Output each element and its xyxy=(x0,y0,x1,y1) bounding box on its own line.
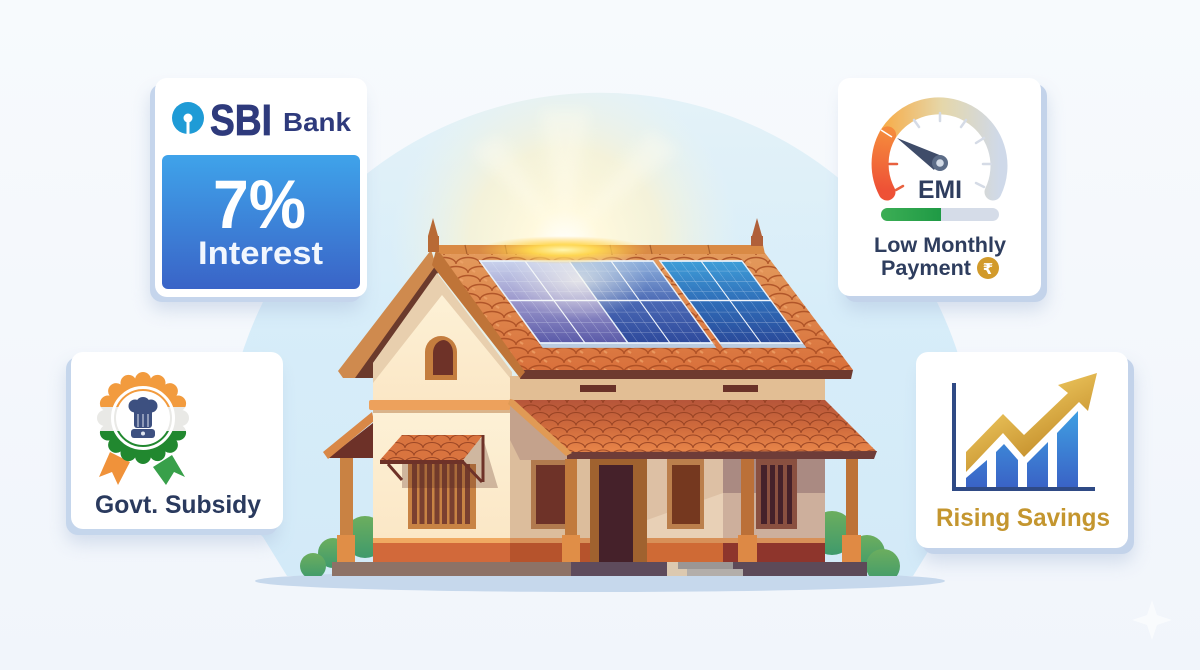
upper gable wall xyxy=(345,260,512,402)
interest rate panel: Interest xyxy=(198,235,323,271)
slatted window under awning xyxy=(402,438,498,529)
tricolour rosette xyxy=(97,372,189,464)
seal ring xyxy=(112,388,174,448)
upper right wall xyxy=(510,376,825,402)
left side porch roof xyxy=(323,412,374,459)
label: low monthly payment: Payment xyxy=(881,257,971,280)
bank name xyxy=(210,96,352,145)
interest rate panel: 7% xyxy=(213,166,306,243)
label: low monthly payment xyxy=(874,234,1006,280)
chart axes xyxy=(954,383,1095,489)
panel middle xyxy=(568,261,716,348)
door xyxy=(590,459,647,562)
bank name: Bank xyxy=(283,107,352,137)
rising arrow xyxy=(966,373,1097,472)
left ground floor wall xyxy=(373,410,510,562)
bushes xyxy=(300,511,900,583)
belt course xyxy=(369,400,511,410)
label: low monthly payment: Low Monthly xyxy=(874,234,1006,257)
gable arched window xyxy=(425,336,457,380)
progress bar xyxy=(881,208,999,221)
icon: national emblem xyxy=(128,397,158,438)
solar panels xyxy=(479,261,806,348)
icon: rupee coin: ₹ xyxy=(983,261,993,278)
icon: SBI logo xyxy=(172,102,204,135)
sun flare over ridge xyxy=(478,236,648,264)
gauge xyxy=(880,106,999,204)
card: government subsidy xyxy=(66,352,283,543)
ground shadow ellipse xyxy=(255,570,945,592)
label: rising savings: Rising Savings xyxy=(936,504,1110,532)
right ground floor wall xyxy=(510,405,825,562)
icon: rupee coin xyxy=(977,257,999,279)
bank name: SBI xyxy=(210,96,272,145)
window awning xyxy=(380,435,483,482)
panel left xyxy=(479,261,634,348)
interest rate panel xyxy=(162,155,360,289)
left finial xyxy=(428,218,439,252)
gauge: EMI xyxy=(918,176,962,204)
ground floor left window xyxy=(531,460,567,529)
veranda posts xyxy=(337,458,861,562)
sparkle watermark xyxy=(1132,600,1172,640)
vents xyxy=(580,385,758,392)
background dome with sun glow xyxy=(242,92,958,576)
card: SBI 7% interest xyxy=(150,78,367,310)
main tiled roof xyxy=(338,245,853,379)
right finial xyxy=(751,218,763,246)
veranda roof xyxy=(508,399,877,459)
ground floor centre window xyxy=(667,459,704,529)
sun glare on panels xyxy=(508,240,648,320)
ground floor right window xyxy=(756,459,797,529)
plinth and steps xyxy=(332,562,867,576)
chart bars xyxy=(966,411,1078,487)
card: rising savings xyxy=(916,352,1134,562)
panel right xyxy=(659,261,806,348)
ribbon tails xyxy=(99,452,185,485)
house illustration xyxy=(323,218,877,576)
card: EMI gauge xyxy=(838,78,1047,310)
label: govt subsidy: Govt. Subsidy xyxy=(95,491,261,519)
